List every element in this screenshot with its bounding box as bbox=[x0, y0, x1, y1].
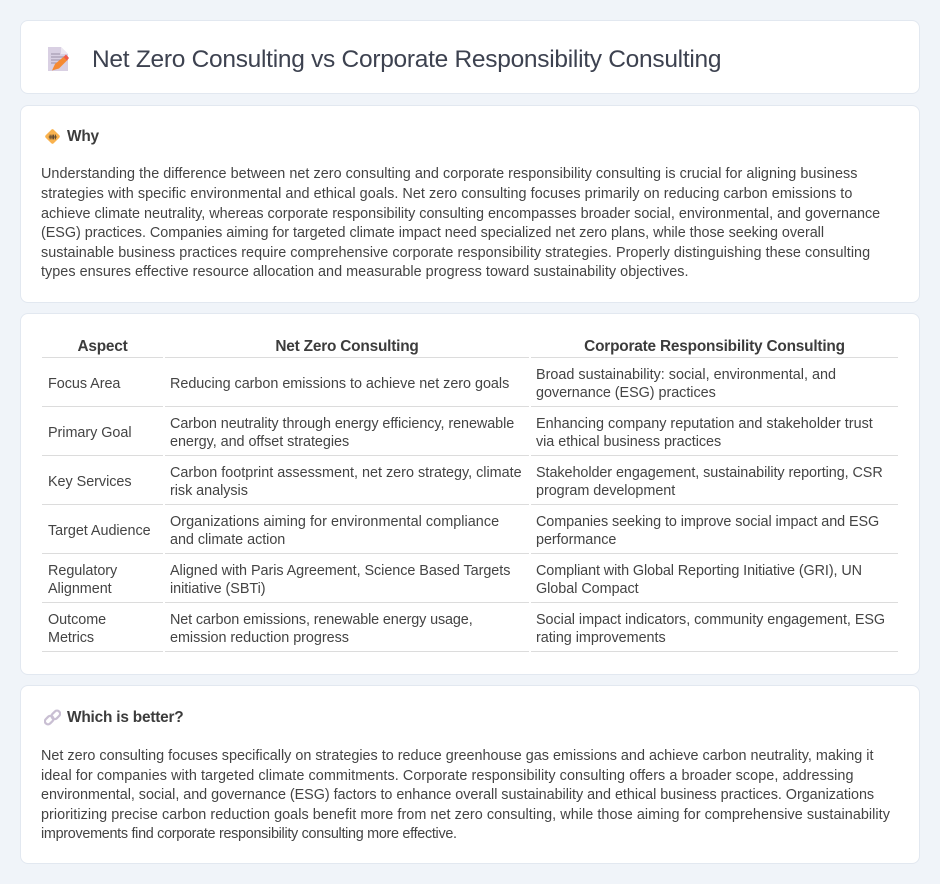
icon: link bbox=[44, 710, 61, 726]
row: regulatory alignment: Compliant with Global Reporting Initiative (GRI), UN bbox=[536, 563, 862, 579]
row: key services bbox=[42, 465, 898, 505]
table header: Net Zero Consulting bbox=[275, 338, 419, 355]
row: outcome metrics: rating improvements bbox=[536, 630, 666, 646]
row: outcome metrics: Social impact indicators, community engagement, ESG bbox=[536, 612, 885, 628]
text block: which is better: Net zero consulting focuses specifically on strategies to reduce greenhouse gas emissions and achieve carbon neutrality, making it bbox=[41, 748, 873, 764]
heading: which is better: Which is better? bbox=[67, 709, 184, 726]
row: regulatory alignment: Alignment bbox=[48, 581, 112, 597]
text block: why: types ensures effective resource allocation and measurable progress toward sustainability objectives. bbox=[41, 264, 688, 280]
row: primary goal bbox=[42, 416, 898, 456]
row: regulatory alignment: Aligned with Paris Agreement, Science Based Targets bbox=[170, 563, 510, 579]
row: key services: program development bbox=[536, 483, 675, 499]
row: regulatory alignment: Regulatory bbox=[48, 563, 117, 579]
row: outcome metrics: Metrics bbox=[48, 630, 94, 646]
row: focus area bbox=[42, 367, 898, 407]
row: key services: Stakeholder engagement, sustainability reporting, CSR bbox=[536, 465, 883, 481]
row: target audience bbox=[42, 514, 898, 554]
table header bbox=[42, 338, 898, 358]
row: regulatory alignment: Global Compact bbox=[536, 581, 639, 597]
row: primary goal: Enhancing company reputation and stakeholder trust bbox=[536, 416, 873, 432]
row: regulatory alignment: initiative (SBTi) bbox=[170, 581, 266, 597]
row: outcome metrics: Net carbon emissions, renewable energy usage, bbox=[170, 612, 473, 628]
row: target audience: Companies seeking to improve social impact and ESG bbox=[536, 514, 879, 530]
panel: title card bbox=[20, 20, 920, 94]
panel: comparison table bbox=[20, 313, 920, 675]
text block: which is better bbox=[41, 748, 890, 842]
row: target audience: Target Audience bbox=[48, 523, 151, 539]
row: focus area: governance (ESG) practices bbox=[536, 385, 716, 401]
row: outcome metrics bbox=[42, 612, 898, 652]
row: focus area: Focus Area bbox=[48, 376, 120, 392]
row: primary goal: Primary Goal bbox=[48, 425, 131, 441]
panel: why bbox=[20, 105, 920, 303]
text block: why: Understanding the difference between net zero consulting and corporate responsibility consulting is crucial for aligning business bbox=[41, 166, 857, 182]
heading: why: Why bbox=[67, 128, 99, 145]
icon: document with pencil bbox=[48, 47, 69, 71]
row: key services: risk analysis bbox=[170, 483, 248, 499]
text block: which is better: environmental, social, and governance (ESG) factors to enhance overall sustainability and ethical business practices. Organizations bbox=[41, 787, 874, 803]
row: target audience: performance bbox=[536, 532, 616, 548]
row: focus area: Broad sustainability: social, environmental, and bbox=[536, 367, 836, 383]
table header: Aspect bbox=[77, 338, 128, 355]
panel: which is better bbox=[20, 685, 920, 864]
row: focus area: Reducing carbon emissions to achieve net zero goals bbox=[170, 376, 509, 392]
text block: which is better: prioritizing precise carbon reduction goals benefit more from net zero consulting, while those aiming for comprehensive sustainability bbox=[41, 807, 890, 823]
row: primary goal: via ethical business practices bbox=[536, 434, 721, 450]
row: outcome metrics: emission reduction progress bbox=[170, 630, 349, 646]
row: regulatory alignment bbox=[42, 563, 898, 603]
row: target audience: Organizations aiming for environmental compliance bbox=[170, 514, 499, 530]
row: primary goal: Carbon neutrality through energy efficiency, renewable bbox=[170, 416, 514, 432]
text block: why: sustainable business practices require comprehensive corporate responsibility strategies. Properly distinguishing these consulting bbox=[41, 245, 870, 261]
row: key services: Key Services bbox=[48, 474, 132, 490]
text block: why: (ESG) practices. Companies aiming for targeted climate impact need specialized net zero plans, while those seeking overall bbox=[41, 225, 824, 241]
table header: Corporate Responsibility Consulting bbox=[584, 338, 845, 355]
title: Net Zero Consulting vs Corporate Responsibility Consulting bbox=[92, 46, 721, 73]
icon: road sign bbox=[45, 129, 60, 144]
row: primary goal: energy, and offset strategies bbox=[170, 434, 349, 450]
row: target audience: and climate action bbox=[170, 532, 285, 548]
text block: why: achieve climate neutrality, whereas corporate responsibility consulting encompasses broader social, environmental, and governance bbox=[41, 206, 880, 222]
text block: why: strategies with specific environmental and ethical goals. Net zero consulting focuses primarily on reducing carbon emissions to bbox=[41, 186, 852, 202]
row: key services: Carbon footprint assessment, net zero strategy, climate bbox=[170, 465, 522, 481]
row: outcome metrics: Outcome bbox=[48, 612, 106, 628]
text block: which is better: improvements find corporate responsibility consulting more effective. bbox=[41, 826, 457, 842]
text block: why bbox=[41, 166, 880, 280]
text block: which is better: ideal for companies with targeted climate commitments. Corporate responsibility consulting offers a broader scope, addressing bbox=[41, 768, 854, 784]
